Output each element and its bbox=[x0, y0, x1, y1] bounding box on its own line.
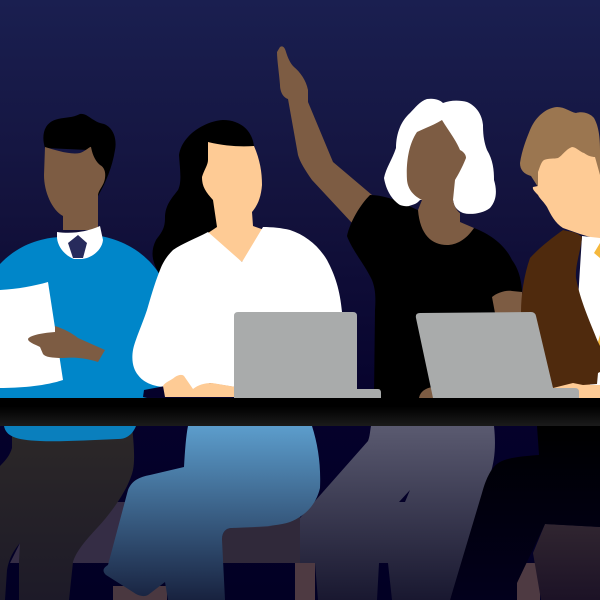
hair bbox=[520, 107, 600, 187]
navy notch bbox=[409, 201, 424, 213]
sweater hem bbox=[4, 426, 136, 441]
navy gap bbox=[143, 386, 165, 397]
tie bbox=[594, 243, 600, 350]
hand bbox=[163, 375, 236, 397]
arm bbox=[277, 46, 372, 223]
hand low bbox=[419, 387, 436, 398]
laptop 2 bbox=[416, 312, 579, 398]
chair seat under person 2 bbox=[222, 516, 300, 563]
blouse bbox=[132, 227, 342, 390]
face and neck bbox=[407, 120, 474, 245]
tie bbox=[68, 235, 87, 258]
person 4: legs bbox=[450, 426, 600, 600]
shirt bbox=[347, 195, 522, 398]
collar bbox=[57, 226, 103, 259]
person 1: legs bbox=[0, 426, 134, 600]
person 2 bbox=[132, 120, 342, 397]
white hair bbox=[384, 99, 496, 214]
person 4: chair seat bbox=[533, 524, 600, 600]
person 4 bbox=[520, 107, 600, 398]
person 1 bbox=[0, 114, 175, 441]
jacket bbox=[521, 230, 600, 388]
table bbox=[0, 398, 600, 426]
person 3 bbox=[277, 46, 522, 398]
hair bbox=[43, 114, 116, 196]
face bbox=[533, 147, 600, 240]
laptop 1 bbox=[234, 312, 381, 398]
face and neck bbox=[202, 142, 270, 262]
person 2: legs bbox=[104, 426, 320, 600]
hand on laptop bbox=[492, 291, 522, 313]
hand bbox=[28, 326, 105, 362]
shirt bbox=[578, 236, 600, 385]
paper bbox=[0, 282, 63, 388]
chairs bbox=[0, 502, 540, 600]
sweater bbox=[0, 236, 175, 398]
face and neck bbox=[44, 147, 105, 230]
person 3: legs bbox=[222, 426, 495, 600]
hands bbox=[550, 383, 600, 398]
hair bbox=[153, 120, 254, 275]
